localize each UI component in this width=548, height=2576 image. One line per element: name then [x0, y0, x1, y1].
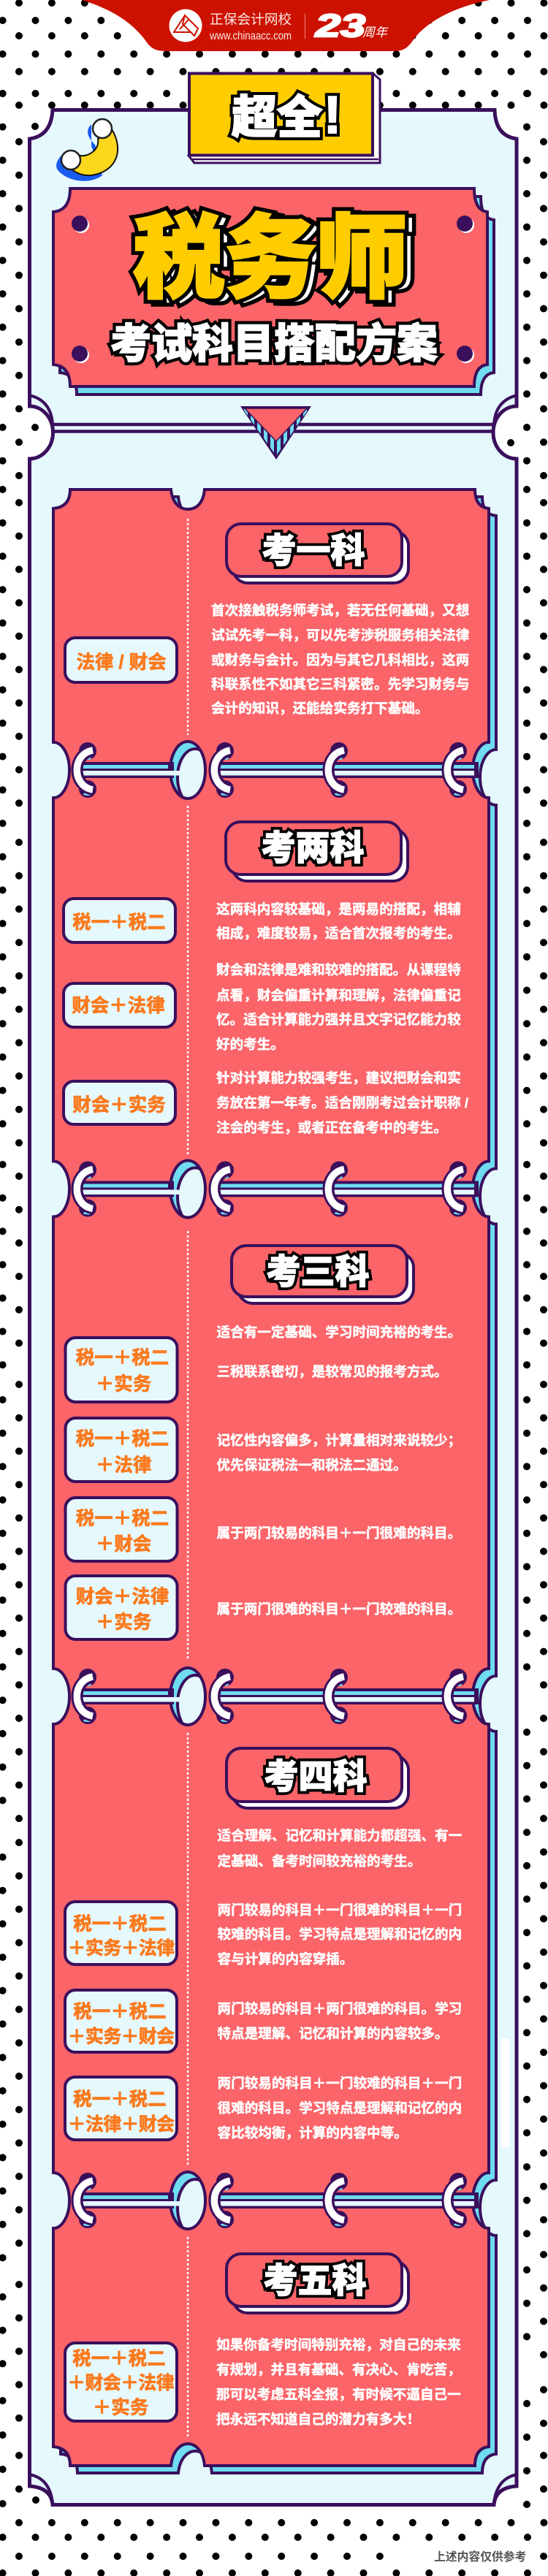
- heading: 考一科: [262, 531, 365, 570]
- text: 财会+实务: 针对计算能力较强考生，建议把财会和实: [216, 1070, 461, 1086]
- title: 税务师: 税务师: [140, 211, 415, 313]
- pill: 税一+税二+法律+财会: 税一＋税二: [73, 2089, 167, 2110]
- section: 考五科: [65, 2254, 461, 2427]
- pill: 法律/财会: 法律 / 财会: [76, 652, 167, 673]
- text: 税一+税二+法律+财会: 很难的科目。学习特点是理解和记忆的内: [218, 2100, 462, 2116]
- description: 把永远不知道自己的潜力有多大！: [216, 2412, 420, 2427]
- pill: 税一+税二: 税一＋税二: [72, 912, 166, 933]
- binder rings 3: [77, 1669, 479, 1724]
- heading: 考四科: [265, 1757, 367, 1796]
- text: 财会+实务: 注会的考生，或者正在备考中的考生。: [216, 1120, 447, 1135]
- text: 财会+法律: 点看，财会偏重计算和理解，法律偏重记: [216, 988, 461, 1003]
- pill: 税一+税二+实务+财会: [65, 1990, 177, 2052]
- badge: 超全: [189, 73, 380, 163]
- pill: 税一+税二+财会: ＋财会: [96, 1534, 151, 1555]
- heading: 考一科: [262, 531, 365, 570]
- description: [211, 603, 470, 716]
- subtitle: 考试科目搭配方案: [110, 321, 438, 367]
- arrow: downward triangle: [240, 406, 311, 460]
- pill: 税一+税二+实务: [66, 1338, 177, 1402]
- corner rivets: [72, 216, 474, 363]
- 23 anniversary badge: 周年: [362, 26, 389, 39]
- pill: 税一+税二+法律+财会: [65, 2077, 177, 2140]
- subtitle: 考试科目搭配方案: [110, 321, 438, 367]
- section: 考四科: [65, 1748, 462, 2141]
- badge: 超全: 超全!: [232, 86, 341, 145]
- pill: 税一+税二+实务+财会: 税一＋税二: [73, 2002, 167, 2022]
- text: 税一+税二: 相成，难度较易，适合首次报考的考生。: [216, 926, 461, 941]
- heading: [226, 822, 408, 881]
- heading: 考三科: [266, 1252, 370, 1291]
- top brand banner: [82, 0, 490, 51]
- text: 税一+税二+财会: 属于两门较易的科目＋一门很难的科目。: [216, 1525, 461, 1541]
- description: [216, 2337, 461, 2427]
- text: 税一+税二+实务+法律: [218, 1902, 462, 1967]
- heading: [227, 1748, 408, 1808]
- text: 财会+法律: 忆。适合计算能力强并且文字记忆能力较: [216, 1012, 461, 1027]
- binder rings 2: [77, 1162, 479, 1217]
- 23 anniversary badge: 23: [315, 8, 365, 44]
- text: 税一+税二+法律+财会: [218, 2076, 462, 2141]
- pill: 法律/财会: [65, 638, 177, 682]
- section: 考三科: [66, 1246, 461, 1639]
- intro text: 定基础、备考时间较充裕的考生。: [218, 1853, 421, 1869]
- text: 财会+法律: [216, 962, 461, 1052]
- panel: main title: [53, 188, 494, 395]
- section: 考两科: [64, 822, 468, 1135]
- text: 税一+税二: [216, 902, 461, 941]
- description: 或财务与会计。因为与其它几科相比，这两: [211, 652, 469, 668]
- text: 财会+法律: 好的考生。: [216, 1037, 284, 1052]
- title: 税务师: 税务师: [133, 208, 408, 310]
- intro text: 适合有一定基础、学习时间充裕的考生。: [216, 1325, 461, 1340]
- description: 如果你备考时间特别充裕，对自己的未来: [216, 2337, 461, 2352]
- brand name: 正保会计网校: [210, 12, 292, 27]
- pill: 税一+税二+法律: 税一＋税二: [76, 1429, 169, 1449]
- heading: [232, 1246, 414, 1303]
- badge: 超全: 超全!: [232, 86, 341, 145]
- heading: 考三科: [266, 1252, 370, 1291]
- text: 财会+实务: [216, 1070, 468, 1135]
- pill: 税一+税二+实务+财会: ＋实务＋财会: [68, 2027, 175, 2047]
- title: 税务师: 税务师: [133, 208, 408, 310]
- description: 有规划，并且有基础、有决心、肯吃苦，: [216, 2362, 461, 2377]
- icon: logo: [170, 9, 202, 42]
- heading: [227, 2254, 408, 2313]
- pill: 税一+税二+实务: ＋实务: [96, 1374, 151, 1395]
- pill: 税一+税二+财会+法律+实务: ＋实务: [93, 2398, 148, 2418]
- pill: 财会+法律+实务: [66, 1576, 177, 1639]
- text: 税一+税二: 这两科内容较基础，是两易的搭配，相辅: [216, 902, 461, 917]
- 23 anniversary badge: [315, 8, 389, 44]
- pill: 税一+税二+法律: [66, 1418, 177, 1482]
- heading: 考五科: [263, 2261, 367, 2300]
- pill: 税一+税二+财会: [66, 1498, 177, 1561]
- section: 考一科: [65, 524, 470, 716]
- text: 税一+税二+实务+财会: [218, 2001, 462, 2041]
- text: 税一+税二+实务+法律: 两门较易的科目＋一门很难的科目＋一门: [218, 1902, 462, 1918]
- description: 科联系性不如其它三科紧密。先学习财务与: [211, 677, 469, 692]
- text: 税一+税二+实务+财会: 特点是理解、记忆和计算的内容较多。: [218, 2026, 449, 2041]
- heading: 考四科: [265, 1757, 367, 1796]
- description: 首次接触税务师考试，若无任何基础，又想: [211, 603, 470, 618]
- text: 税一+税二+法律+财会: 两门较易的科目＋一门较难的科目＋一门: [218, 2076, 462, 2091]
- pill: 财会+法律+实务: 财会＋法律: [76, 1587, 169, 1607]
- pill: 税一+税二+法律+财会: ＋法律＋财会: [68, 2114, 175, 2135]
- pill: 税一+税二+财会+法律+实务: ＋财会＋法律: [67, 2373, 175, 2393]
- text: 税一+税二+法律: 记忆性内容偏多，计算量相对来说较少；: [216, 1433, 461, 1448]
- pill: 财会+实务: [64, 1081, 175, 1124]
- text: 税一+税二+法律: 优先保证税法一和税法二通过。: [216, 1457, 407, 1473]
- text: 税一+税二+法律+财会: 容比较均衡，计算的内容中等。: [218, 2125, 408, 2141]
- pill: 税一+税二+法律: ＋法律: [96, 1455, 151, 1476]
- pill: 财会+法律: 财会＋法律: [72, 996, 165, 1016]
- panel: notebook sections background: [44, 489, 496, 2473]
- text: 财会+法律: 财会和法律是难和较难的搭配。从课程特: [216, 962, 461, 978]
- intro text: 适合理解、记忆和计算能力都超强、有一: [218, 1828, 462, 1843]
- pill: 财会+法律: [64, 983, 175, 1027]
- text: 税一+税二+实务+法律: 容与计算的内容穿插。: [218, 1951, 353, 1967]
- pill: 税一+税二+财会+法律+实务: [65, 2343, 177, 2421]
- text: 财会+实务: 务放在第一年考。适合刚刚考过会计职称 /: [216, 1095, 468, 1110]
- binder rings 1: [77, 742, 479, 798]
- intro text: [218, 1828, 462, 1869]
- icon: yellow swirl: [56, 119, 118, 181]
- pill: 税一+税二+实务+法律: ＋实务＋法律: [68, 1938, 175, 1959]
- heading: 考五科: [263, 2261, 367, 2300]
- description: 试试先考一科，可以先考涉税服务相关法律: [211, 628, 470, 643]
- pill: 税一+税二+财会: 税一＋税二: [76, 1509, 169, 1529]
- footnote: 上述内容仅供参考: [434, 2550, 526, 2564]
- binder rings 4: [77, 2173, 479, 2228]
- text: 税一+税二+实务+财会: 两门较易的科目＋两门很难的科目。学习: [218, 2001, 462, 2016]
- pill: 税一+税二+财会+法律+实务: 税一＋税二: [72, 2349, 166, 2369]
- text: 税一+税二+法律: [216, 1433, 461, 1473]
- description: 那可以考虑五科全报，有时候不逼自己一: [216, 2387, 461, 2402]
- title: 税务师: 税务师: [140, 211, 415, 313]
- description: 会计的知识，还能给实务打下基础。: [211, 701, 429, 716]
- text: 税一+税二+实务: 三税联系密切，是较常见的报考方式。: [216, 1364, 448, 1379]
- pill: 税一+税二+实务+法律: 税一＋税二: [73, 1914, 167, 1935]
- text: 税一+税二+实务+法律: 较难的科目。学习特点是理解和记忆的内: [218, 1927, 462, 1942]
- text: 财会+法律+实务: 属于两门很难的科目＋一门较难的科目。: [216, 1601, 461, 1617]
- pill: 税一+税二: [64, 899, 175, 942]
- heading: [227, 524, 408, 583]
- brand url: www.chinaacc.com: [209, 30, 292, 42]
- pill: 税一+税二+实务: 税一＋税二: [76, 1348, 169, 1368]
- pill: 税一+税二+实务+法律: [65, 1902, 177, 1965]
- heading: 考两科: [262, 828, 364, 867]
- pill: 财会+实务: 财会＋实务: [72, 1095, 166, 1116]
- pill: 财会+法律+实务: ＋实务: [96, 1612, 151, 1633]
- heading: 考两科: [262, 828, 364, 867]
